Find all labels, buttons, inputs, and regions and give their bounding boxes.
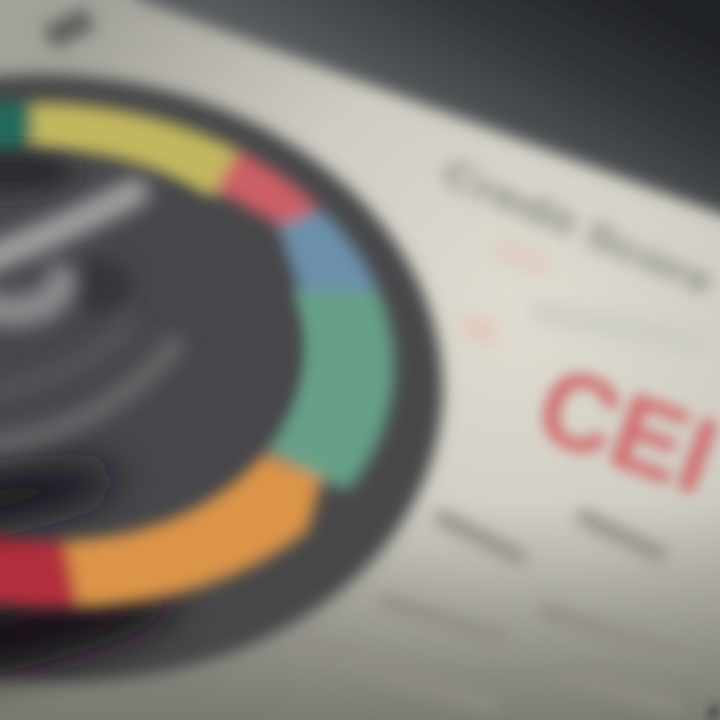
- segment: yellow: [16, 91, 247, 204]
- segment: red: [0, 527, 88, 620]
- inner disc: [161, 180, 308, 456]
- segment: green: [260, 282, 404, 498]
- faint grey line under heading: [536, 305, 647, 334]
- inner disc upper-left shadow: [0, 152, 75, 192]
- centre dark spot: [68, 257, 132, 313]
- outer dark disc: [0, 49, 463, 707]
- segment: pink red: [211, 146, 326, 236]
- dark table background: [100, 0, 720, 236]
- segment: orange: [62, 446, 322, 640]
- chart: colour wheel: [0, 49, 463, 713]
- blurred body text lines: [380, 504, 672, 709]
- faint red notes: [462, 245, 544, 344]
- segment: teal: [0, 94, 40, 153]
- colour ring segments: [0, 92, 404, 620]
- small top-left mark: [43, 7, 95, 49]
- segment: blue: [270, 200, 386, 303]
- lower disc shadow: [0, 594, 188, 702]
- corner shadow: [705, 700, 718, 718]
- heading text on paper (blurred): Credit Score: [437, 152, 720, 303]
- paper bottom shading: [0, 523, 720, 720]
- inner disc lower shadow: [0, 454, 122, 546]
- light swirl highlights: [0, 192, 175, 445]
